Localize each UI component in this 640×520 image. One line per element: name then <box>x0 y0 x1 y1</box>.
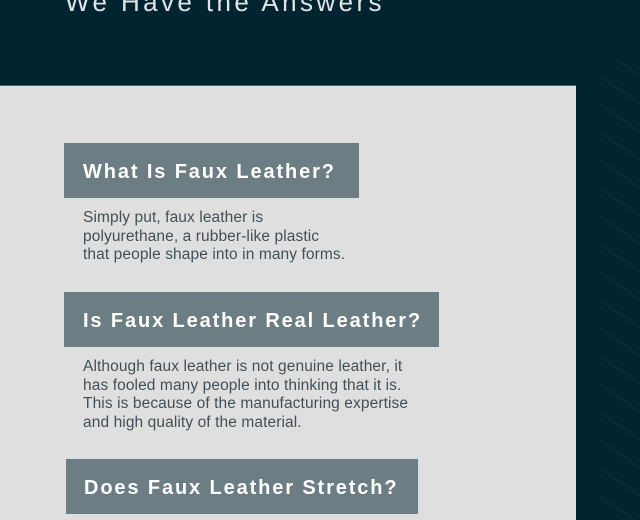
text block: definition: that people shape into in many forms. <box>83 246 345 263</box>
heading: Is Faux Leather Real Leather?: Is Faux Leather Real Leather? <box>83 310 422 332</box>
heading: Does Faux Leather Stretch?: Does Faux Leather Stretch? <box>84 477 399 499</box>
text block: real leather answer: and high quality of the material. <box>83 414 302 431</box>
heading: What Is Faux Leather? <box>64 143 359 198</box>
text block: real leather answer: has fooled many people into thinking that it is. <box>83 377 401 394</box>
heading: Does Faux Leather Stretch? <box>66 459 418 514</box>
decorative background stripes <box>576 60 640 520</box>
heading: What Is Faux Leather?: What Is Faux Leather? <box>83 161 336 183</box>
text block: definition: Simply put, faux leather is <box>83 209 263 226</box>
text block: definition <box>83 209 345 263</box>
text block: real leather answer: This is because of the manufacturing expertise <box>83 395 408 412</box>
content panel <box>0 86 576 520</box>
text block: real leather answer <box>83 358 408 431</box>
heading: Is Faux Leather Real Leather? <box>64 292 439 347</box>
text block: definition: polyurethane, a rubber-like plastic <box>83 228 319 245</box>
text block: real leather answer: Although faux leather is not genuine leather, it <box>83 358 402 375</box>
